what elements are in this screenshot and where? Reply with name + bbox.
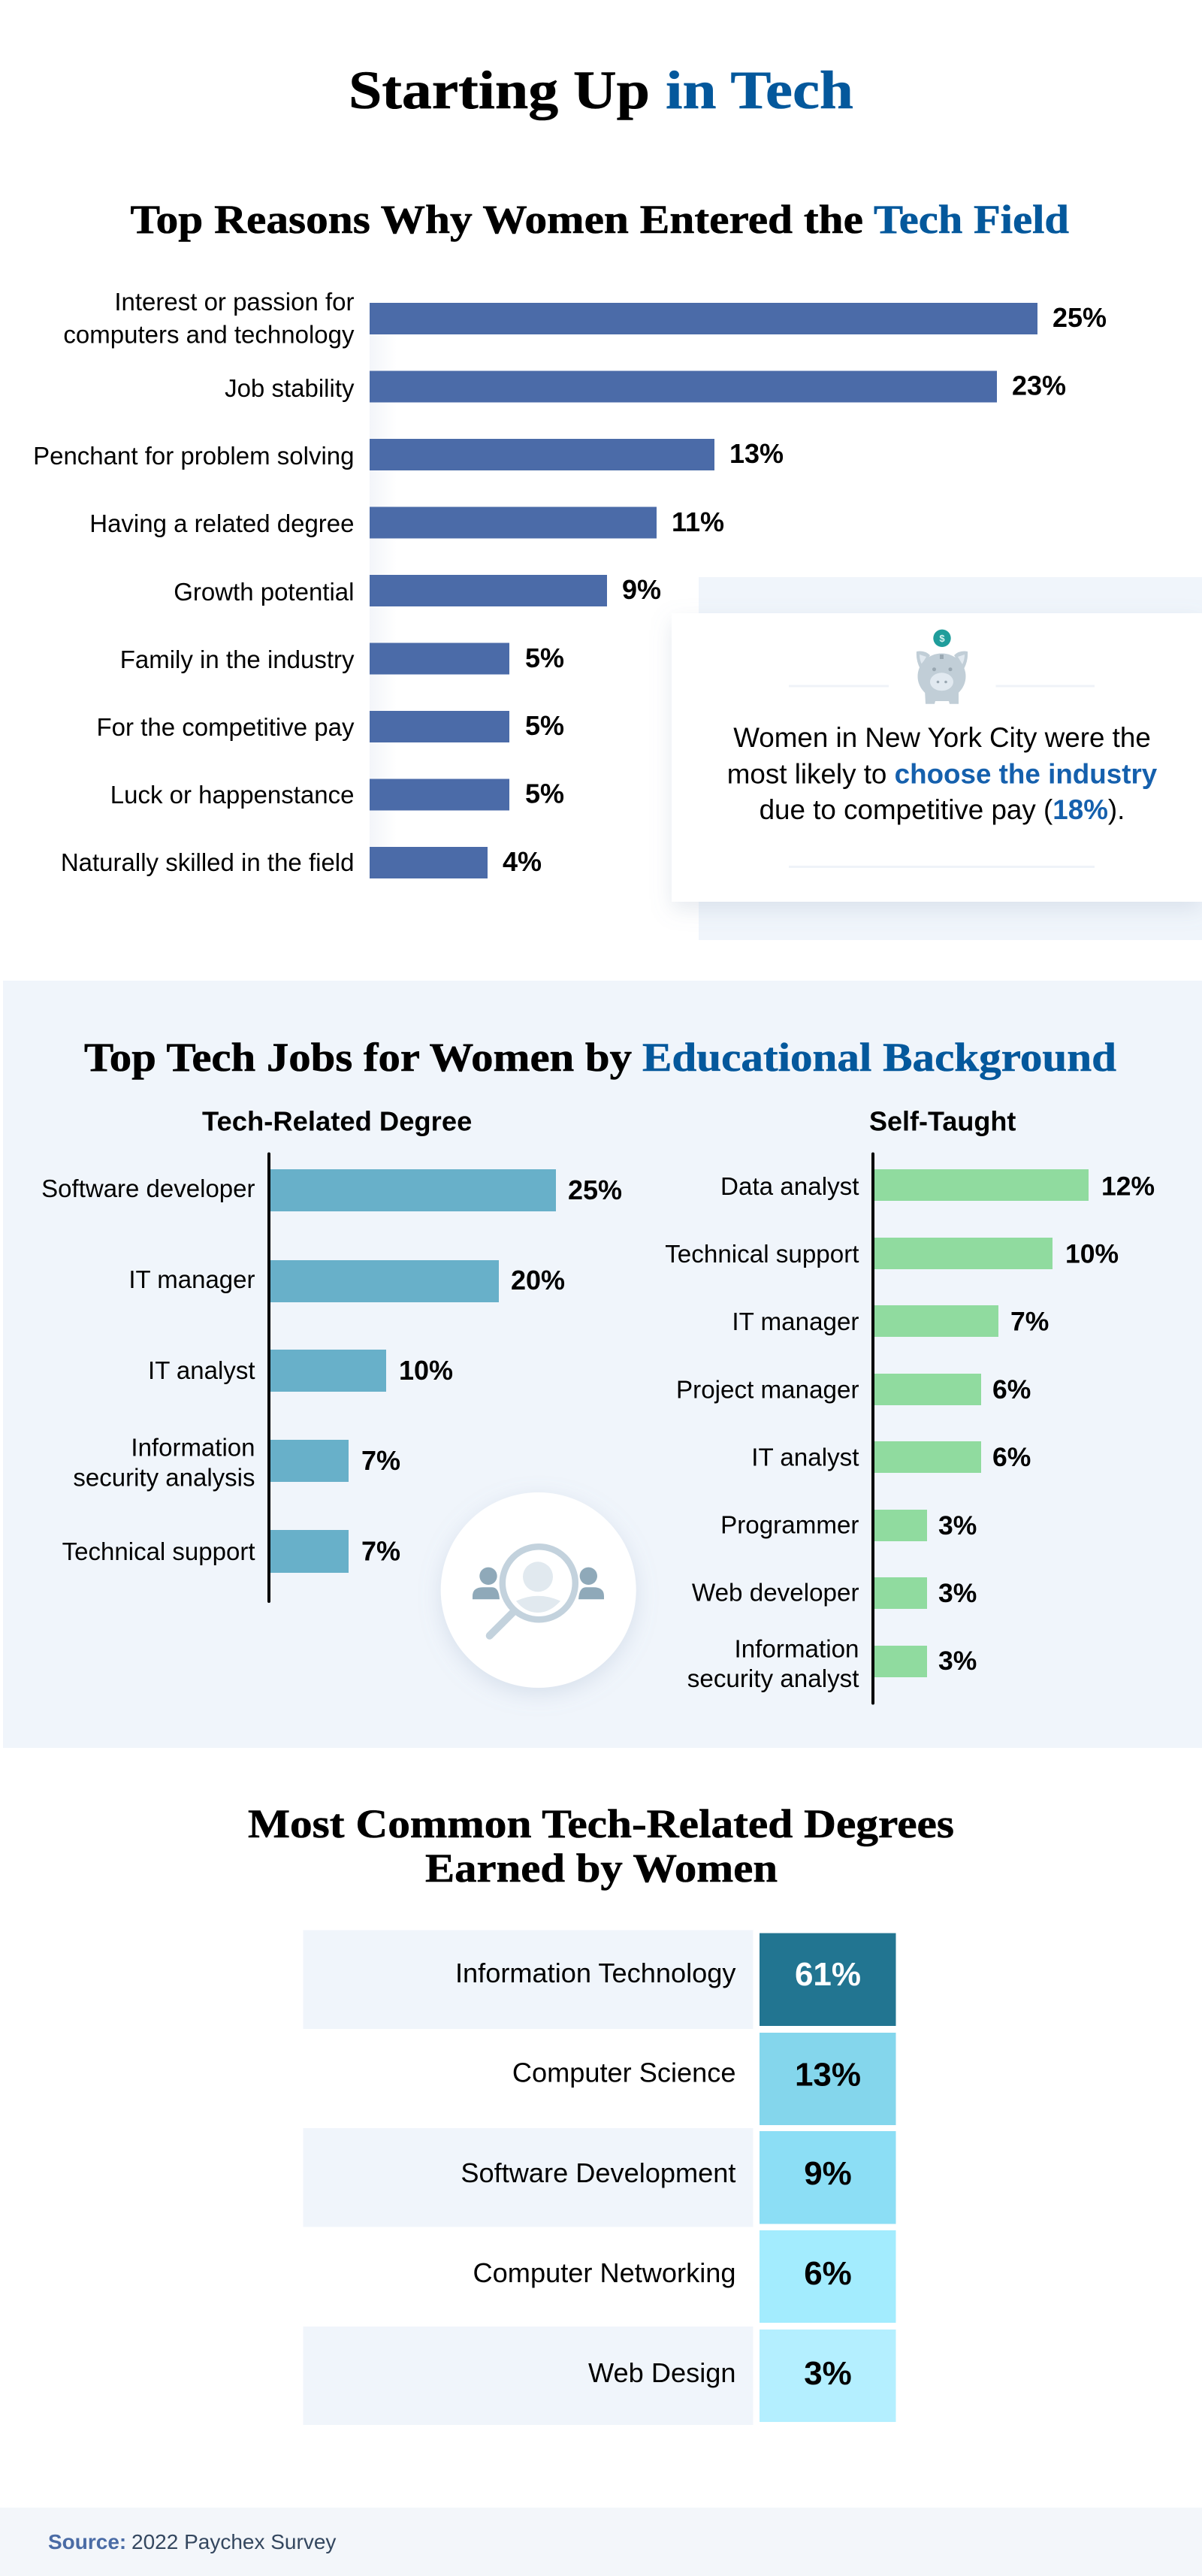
row: technical support: 7% — [361, 1536, 400, 1566]
row: computer science — [512, 2033, 895, 2125]
row: it analyst: IT analyst — [751, 1444, 859, 1471]
icon: magnifier over people — [441, 1492, 636, 1688]
row: computer science: Computer Science — [512, 2057, 736, 2088]
row: information technology: Information Technology — [455, 1958, 736, 1988]
heading: most common degrees: Earned by Women — [425, 1846, 778, 1891]
footer: source — [0, 2508, 1202, 2576]
table: degrees — [304, 1930, 895, 2425]
row: family in the industry — [120, 642, 564, 675]
panel: top tech jobs — [3, 981, 1202, 1748]
row: it manager: IT manager — [128, 1265, 255, 1293]
row: growth potential: Growth potential — [174, 578, 355, 606]
row: technical support: Technical support — [62, 1537, 255, 1565]
row: it manager — [128, 1260, 565, 1302]
row: software developer: Software developer — [41, 1175, 255, 1202]
bar chart: top reasons — [33, 288, 1107, 878]
row: software development: 9% — [804, 2155, 852, 2192]
row: related degree: Having a related degree — [89, 509, 355, 537]
row: computer networking — [473, 2230, 895, 2323]
row: growth potential — [174, 574, 661, 606]
row: information security analyst: security analyst — [687, 1665, 859, 1693]
row: it analyst — [148, 1350, 453, 1392]
row: information security analyst — [687, 1635, 977, 1693]
row: competitive pay: 5% — [525, 710, 564, 741]
row: software development — [304, 2128, 895, 2227]
row: project manager: 6% — [992, 1374, 1031, 1404]
row: interest or passion: computers and technology — [63, 320, 355, 349]
row: data analyst: 12% — [1101, 1171, 1155, 1201]
row: project manager: Project manager — [676, 1377, 859, 1404]
callout panel: new york city — [672, 577, 1202, 940]
row: it manager: IT manager — [732, 1308, 859, 1336]
row: web design: 3% — [804, 2355, 852, 2392]
row: web developer — [692, 1577, 977, 1609]
row: computer networking: 6% — [804, 2255, 852, 2292]
row: job stability: Job stability — [225, 374, 355, 402]
row: it analyst: 6% — [992, 1442, 1031, 1472]
title — [349, 60, 853, 120]
row: programmer — [720, 1510, 977, 1541]
row: information security analysis: security analysis — [73, 1464, 255, 1491]
heading: top tech jobs: Top Tech Jobs for Women by — [84, 1035, 632, 1080]
row: competitive pay: For the competitive pay — [96, 713, 355, 741]
footer: source: 2022 Paychex Survey — [131, 2530, 336, 2553]
subheading: tech-related degree: Tech-Related Degree — [202, 1106, 472, 1136]
row: naturally skilled: 4% — [503, 846, 542, 877]
row: information security analysis — [73, 1434, 400, 1491]
row: information security analysis: 7% — [361, 1445, 400, 1476]
row: software development: Software Development — [461, 2157, 736, 2188]
callout text: most likely to choose the industry — [727, 759, 1158, 789]
callout text — [727, 722, 1158, 825]
row: technical support — [665, 1238, 1119, 1269]
row: family in the industry: 5% — [525, 642, 564, 673]
heading: most common degrees: Most Common Tech-Related Degrees — [248, 1801, 954, 1846]
row: technical support — [62, 1530, 400, 1573]
callout text: Women in New York City were the — [733, 722, 1151, 753]
row: luck: Luck or happenstance — [110, 781, 355, 809]
title: in Tech — [666, 60, 853, 120]
row: naturally skilled — [61, 846, 542, 878]
row: related degree — [89, 506, 724, 538]
row: job stability: 23% — [1012, 370, 1066, 401]
row: luck — [110, 779, 564, 810]
callout text: due to competitive pay (18%). — [760, 794, 1125, 825]
row: it analyst — [751, 1441, 1031, 1473]
footer: source: Source: — [48, 2530, 126, 2553]
row: it manager: 20% — [511, 1265, 565, 1296]
row: programmer: 3% — [938, 1510, 977, 1540]
row: web developer: Web developer — [692, 1580, 859, 1607]
bar chart: tech-related degree — [41, 1153, 622, 1603]
bar chart: self-taught — [665, 1153, 1155, 1704]
row: web developer: 3% — [938, 1578, 977, 1608]
title: Starting Up — [349, 60, 650, 120]
row: problem solving — [33, 438, 784, 470]
row: family in the industry: Family in the industry — [120, 646, 355, 673]
heading: top tech jobs — [84, 1035, 1116, 1080]
heading: top tech jobs: Educational Background — [642, 1035, 1116, 1080]
row: growth potential: 9% — [622, 574, 661, 605]
row: software developer: 25% — [568, 1175, 622, 1205]
row: data analyst — [720, 1169, 1155, 1201]
row: software developer — [41, 1169, 622, 1211]
row: competitive pay — [96, 710, 564, 742]
row: data analyst: Data analyst — [720, 1173, 859, 1201]
row: technical support: Technical support — [665, 1241, 859, 1268]
row: information security analyst: Information — [734, 1635, 859, 1664]
row: interest or passion — [63, 288, 1107, 349]
icon: piggy bank — [917, 630, 968, 704]
heading: top reasons: Tech Field — [874, 197, 1069, 242]
row: technical support: 10% — [1065, 1238, 1119, 1268]
subheading: self-taught: Self-Taught — [869, 1106, 1016, 1136]
row: it manager — [732, 1305, 1049, 1337]
heading: most common degrees — [248, 1801, 954, 1891]
row: it manager: 7% — [1010, 1306, 1049, 1336]
row: problem solving: Penchant for problem solving — [33, 442, 355, 470]
row: related degree: 11% — [672, 506, 724, 537]
row: project manager — [676, 1374, 1031, 1405]
row: information security analysis: Information — [131, 1434, 255, 1461]
row: programmer: Programmer — [720, 1512, 859, 1539]
row: interest or passion: Interest or passion for — [114, 288, 355, 316]
row: luck: 5% — [525, 779, 564, 809]
row: computer science: 13% — [795, 2056, 861, 2094]
heading: top reasons: Top Reasons Why Women Entered the — [131, 197, 863, 242]
row: problem solving: 13% — [729, 438, 784, 469]
icon: piggy bank: $ — [939, 633, 945, 644]
row: information security analyst: 3% — [938, 1646, 977, 1676]
row: job stability — [225, 370, 1066, 403]
row: web design — [304, 2327, 895, 2425]
row: it analyst: IT analyst — [148, 1356, 255, 1384]
row: information technology: 61% — [795, 1956, 861, 1993]
row: naturally skilled: Naturally skilled in the field — [61, 848, 355, 876]
row: web design: Web Design — [588, 2357, 736, 2388]
row: interest or passion: 25% — [1053, 302, 1107, 333]
row: information technology — [304, 1930, 895, 2029]
row: it analyst: 10% — [399, 1355, 453, 1386]
row: computer networking: Computer Networking — [473, 2257, 736, 2288]
